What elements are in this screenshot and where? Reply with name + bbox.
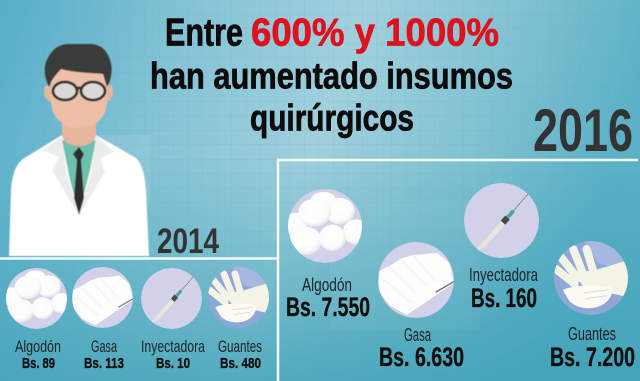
doctor ears	[44, 85, 113, 102]
doctor hair	[45, 44, 112, 87]
item: inyectadora 2016	[464, 183, 539, 313]
item: inyectadora 2016: Inyectadora	[469, 265, 539, 285]
panel: 2016	[278, 160, 638, 381]
doctor shirt	[62, 140, 96, 214]
doctor coat	[9, 135, 149, 256]
item: gasa 2016: Gasa	[404, 325, 432, 345]
item: guantes 2014: Bs. 480	[220, 355, 261, 372]
item: inyectadora 2014: Inyectadora	[141, 338, 206, 356]
title	[150, 12, 513, 138]
item: algodón 2014: Bs. 89	[22, 355, 55, 372]
item: gasa 2014: Bs. 113	[84, 355, 124, 372]
doctor glasses	[53, 82, 105, 100]
panel 2014 border	[0, 257, 277, 260]
icon: doctor illustration	[9, 44, 149, 256]
doctor neck	[62, 118, 96, 146]
item: gasa 2016	[378, 242, 464, 372]
item: inyectadora 2014	[141, 268, 206, 372]
item: gasa 2016: Bs. 6.630	[379, 342, 464, 372]
item: gasa 2014: Gasa	[91, 338, 118, 356]
year 2014: 2014	[157, 222, 219, 261]
item: guantes 2014: Guantes	[218, 338, 262, 356]
title line 1 red: 600% y 1000%	[251, 12, 499, 54]
item: algodón 2016	[284, 189, 370, 322]
item: algodón 2016: Bs. 7.550	[286, 292, 370, 322]
item: gasa 2014	[72, 267, 133, 372]
title line 3: quirúrgicos	[250, 98, 414, 138]
item: algodón 2014: Algodón	[15, 338, 61, 356]
item: inyectadora 2016: Bs. 160	[471, 283, 537, 313]
title line 2: han aumentado insumos	[150, 56, 513, 96]
panel: 2014	[0, 258, 277, 372]
item: algodón 2014	[2, 268, 73, 372]
item: algodón 2016: Algodón	[302, 275, 352, 295]
item: inyectadora 2014: Bs. 10	[156, 355, 190, 372]
item: guantes 2016	[550, 241, 635, 372]
item: guantes 2016: Guantes	[568, 324, 616, 344]
doctor lapels	[43, 136, 114, 214]
item: guantes 2014	[208, 267, 269, 372]
doctor tie	[73, 147, 84, 215]
panel 2016 border	[278, 160, 638, 381]
title line 1 black: Entre	[165, 12, 243, 54]
doctor face	[51, 68, 107, 128]
